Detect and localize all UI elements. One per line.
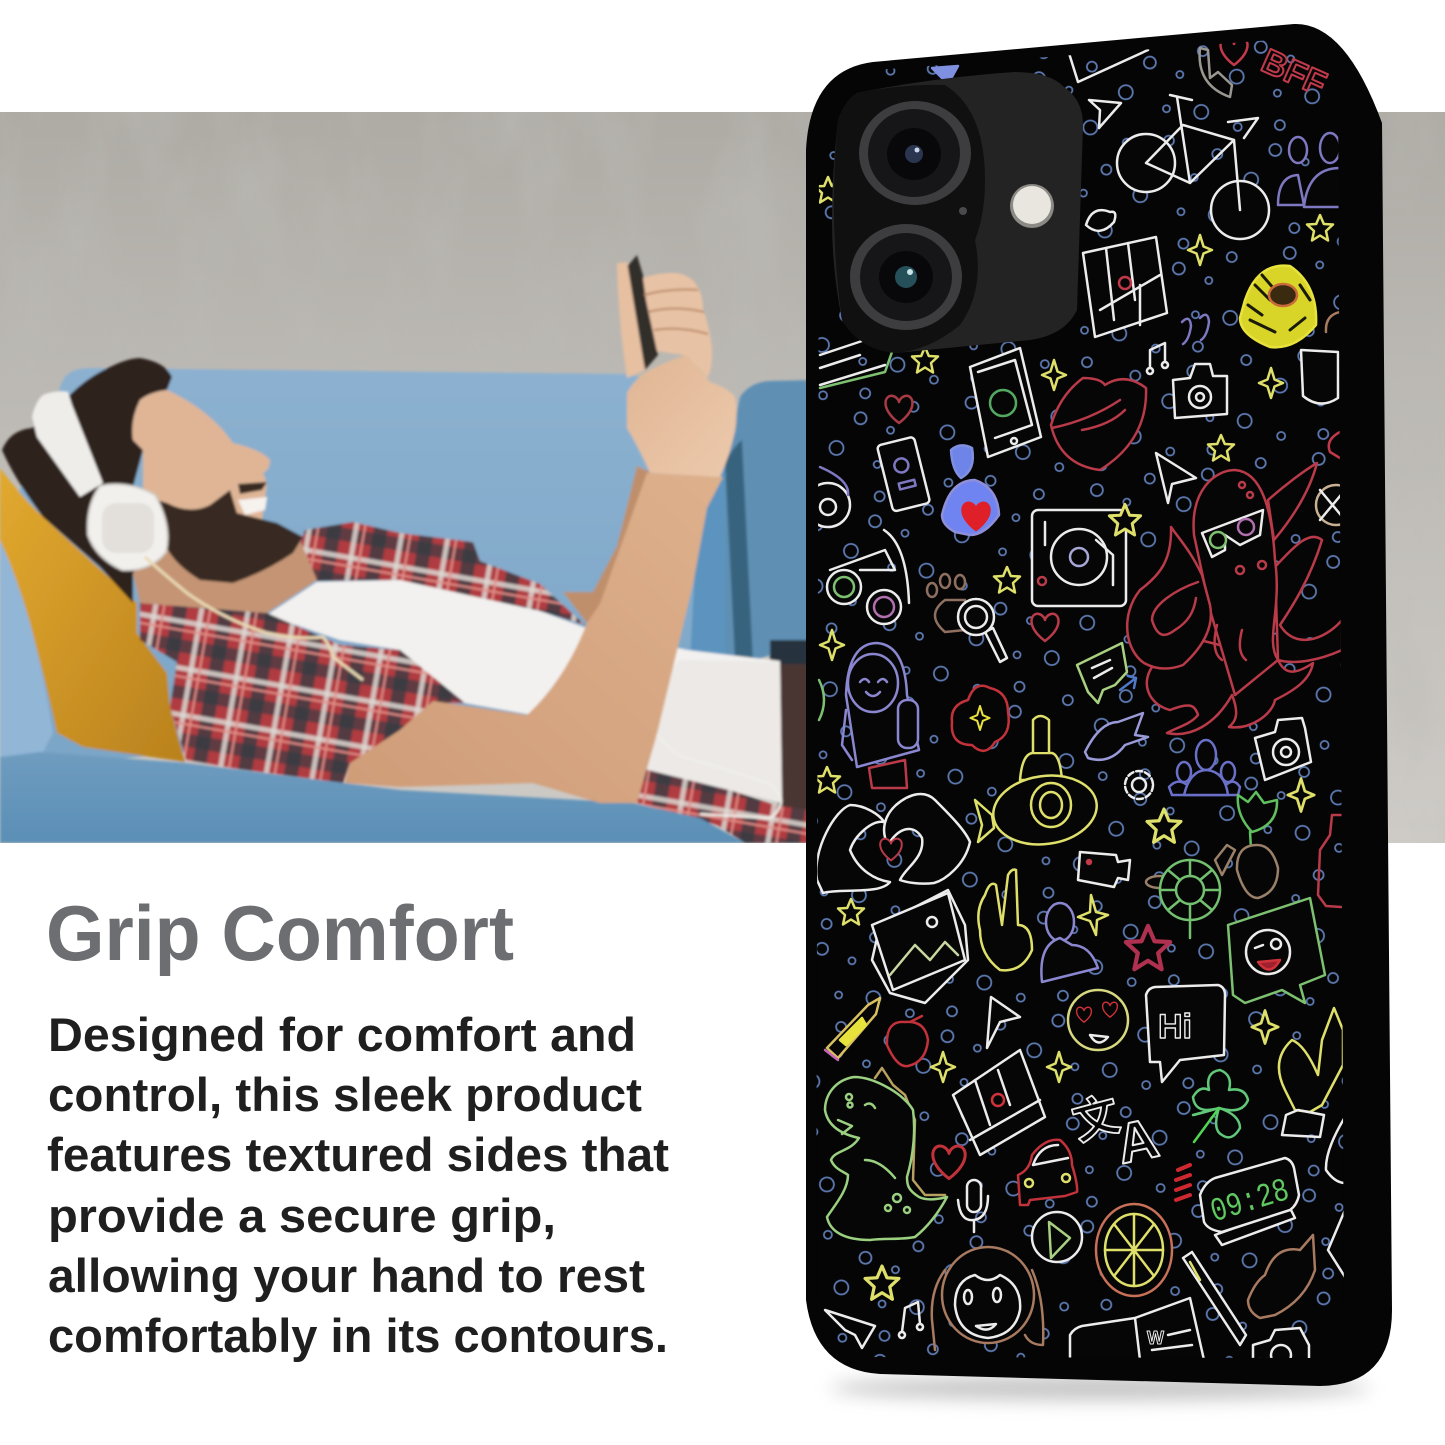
icon: car bbox=[1018, 1140, 1077, 1205]
icon: lemon slice bbox=[1096, 1204, 1172, 1296]
printed back panel bbox=[806, 30, 1356, 1370]
icon: octopus sunglasses bbox=[1202, 510, 1263, 557]
icon: magnifier bbox=[958, 599, 1007, 662]
camera module bbox=[832, 72, 1083, 353]
phone shadow bbox=[830, 1376, 1370, 1400]
icon: BFF: BFF bbox=[1256, 42, 1332, 104]
hair bbox=[2, 358, 172, 603]
icon: small blue drop bbox=[951, 445, 973, 478]
phone case bbox=[806, 24, 1392, 1386]
icon: open book bbox=[1070, 1298, 1204, 1360]
icon: blue dome with heart bbox=[942, 480, 999, 535]
icon: jar bbox=[877, 437, 930, 512]
icon: stars bbox=[814, 177, 1333, 1299]
icon: red object right bbox=[1318, 815, 1341, 907]
icon: monkey bbox=[932, 1247, 1043, 1350]
sofa seat bbox=[0, 752, 745, 843]
icon: camera right bbox=[1255, 718, 1311, 780]
concrete wall bbox=[0, 112, 820, 843]
icon: send triangle bbox=[1156, 453, 1196, 503]
doodle pattern bbox=[806, 38, 1356, 1370]
icon: apple bbox=[887, 1016, 928, 1066]
icon: gear bbox=[1125, 771, 1153, 799]
icon: phone chat bbox=[970, 348, 1041, 457]
icon: cup bbox=[1301, 350, 1338, 404]
neck bbox=[133, 530, 317, 613]
blue strip behind arm bbox=[690, 467, 727, 654]
sofa left side bbox=[0, 540, 53, 757]
body text block: control, this sleek product bbox=[48, 1068, 642, 1121]
icon: planet bbox=[1086, 210, 1115, 231]
icon: map lower bbox=[953, 1050, 1045, 1155]
icon: microphone bbox=[958, 1180, 988, 1232]
microphone dot bbox=[959, 207, 967, 215]
icon: glasses bbox=[827, 530, 909, 624]
jeans at right bbox=[776, 662, 806, 811]
icon: translate symbols: 文 bbox=[1067, 1088, 1125, 1150]
icon: emoji chat bubble bbox=[1228, 898, 1325, 1003]
cable loop at right bbox=[698, 799, 784, 821]
body text block: Designed for comfort and bbox=[48, 1008, 636, 1061]
icon: round pattern right bbox=[1316, 485, 1356, 525]
icon: translate symbols: A bbox=[1111, 1106, 1164, 1176]
main arm bbox=[345, 473, 723, 803]
lower plaid shirt bbox=[140, 603, 465, 783]
icon: person bbox=[1041, 903, 1098, 982]
icon: music note lower bbox=[899, 1302, 923, 1338]
icon: stripes left bbox=[820, 335, 892, 388]
icon: small heart bbox=[886, 396, 912, 423]
icon: picture frame bbox=[872, 890, 968, 1003]
icon: triangle lower bbox=[825, 1310, 875, 1348]
icon: apple outline bbox=[1237, 845, 1278, 898]
octopus head and body bbox=[1194, 470, 1278, 695]
icon: digital clock: 09:28 bbox=[1206, 1172, 1294, 1231]
wall strip right of phone bbox=[1375, 112, 1445, 843]
icon: clover bbox=[1193, 1070, 1248, 1142]
phone in hand bbox=[625, 255, 658, 370]
octopus upper tentacle bbox=[1268, 463, 1317, 540]
icon: check mark top bbox=[1068, 50, 1148, 82]
icon: people top right bbox=[1278, 133, 1340, 207]
icon: play button bbox=[1032, 1212, 1082, 1262]
icon: hands making heart bbox=[816, 794, 970, 893]
icon: turntable bbox=[1032, 510, 1126, 606]
icon: digital clock bbox=[1200, 1158, 1299, 1245]
icon: map bbox=[1083, 237, 1167, 337]
headphones bbox=[32, 391, 168, 570]
icon: peace hand bbox=[978, 870, 1032, 970]
icon: video camera bbox=[1078, 852, 1130, 887]
icon: red star bbox=[1126, 926, 1170, 969]
plaid bottom at right bbox=[637, 768, 815, 843]
icon: small heart mid bbox=[1032, 614, 1058, 641]
body text block bbox=[47, 1008, 669, 1362]
photo: man relaxing on sofa with phone bbox=[0, 112, 820, 843]
icon: triangle bbox=[987, 997, 1020, 1048]
icon: dinosaur bbox=[825, 1068, 947, 1240]
icon: OK hand bbox=[1279, 1008, 1343, 1137]
flash bbox=[1010, 184, 1054, 228]
fist bbox=[627, 355, 736, 477]
octopus right tentacle bbox=[1275, 537, 1342, 662]
octopus lower tentacles bbox=[1147, 640, 1313, 734]
icon: pencil bbox=[825, 998, 880, 1060]
icon: paw bbox=[927, 574, 965, 632]
icon: open book: W bbox=[1147, 1328, 1164, 1348]
icon: bicycle bbox=[1117, 95, 1269, 239]
white t-shirt bbox=[267, 580, 782, 803]
body text block: features textured sides that bbox=[47, 1128, 669, 1181]
icon: toothbrush bbox=[1183, 1252, 1246, 1345]
lower lens bbox=[850, 224, 962, 330]
icon: camera bottom bbox=[1253, 1328, 1309, 1370]
icon: left edge shapes bbox=[806, 467, 850, 720]
body text block: provide a secure grip, bbox=[48, 1189, 556, 1242]
icon: camera bbox=[1173, 364, 1227, 418]
icon: Hi speech bubble bbox=[1146, 985, 1225, 1082]
icon: phone receiver bbox=[1200, 48, 1232, 97]
icon: arcs right edge bbox=[1326, 312, 1345, 1277]
icon: plant bbox=[1238, 792, 1277, 865]
icon: astronaut bbox=[842, 643, 919, 788]
icon: translate symbols bbox=[1067, 1088, 1164, 1176]
upper lens bbox=[859, 101, 971, 205]
icon: people group bbox=[1169, 740, 1240, 795]
icon: send arrow top bbox=[1089, 100, 1121, 128]
icon: blue shape top bbox=[932, 66, 958, 84]
headphone cable bbox=[145, 557, 363, 680]
icon: quotes bbox=[1182, 315, 1209, 344]
man and sofa illustration bbox=[0, 255, 815, 843]
icon: croissant bbox=[1248, 1235, 1315, 1318]
icon: Hi speech bubble: Hi bbox=[1158, 1008, 1192, 1046]
case body bbox=[806, 24, 1392, 1386]
octopus left tentacle bbox=[1127, 527, 1211, 669]
icon: flower bbox=[952, 686, 1009, 751]
heading: Grip Comfort: Grip Comfort bbox=[46, 889, 514, 977]
beard bbox=[150, 490, 303, 583]
body text block: comfortably in its contours. bbox=[48, 1309, 668, 1362]
upper hand with fingers bbox=[617, 262, 712, 378]
smile teeth bbox=[238, 497, 267, 515]
icon: plus sparkle bbox=[1078, 895, 1108, 935]
icon: music note bbox=[1147, 343, 1168, 374]
sofa back bbox=[17, 366, 696, 760]
icon: heart top bbox=[1220, 38, 1248, 65]
icon: submarine bbox=[975, 716, 1101, 851]
icon: yellow rose bbox=[1240, 266, 1316, 347]
icon: lips bbox=[1051, 378, 1146, 470]
face bbox=[130, 388, 272, 521]
upper plaid shirt bbox=[290, 522, 585, 625]
body text block: allowing your hand to rest bbox=[48, 1249, 645, 1302]
sofa arm bbox=[726, 378, 806, 660]
icon: heart-eye emoji bbox=[1068, 990, 1128, 1050]
icon: red heart lower bbox=[933, 1146, 965, 1179]
icon: chat bubble bbox=[1077, 643, 1136, 703]
icon: fish bbox=[1085, 713, 1148, 760]
icon: octopus bbox=[1127, 463, 1342, 734]
pillow bbox=[0, 468, 185, 762]
icon: red sound marks bbox=[1176, 1165, 1190, 1200]
icon: turtle bbox=[1146, 845, 1235, 938]
back arm bbox=[563, 466, 652, 640]
